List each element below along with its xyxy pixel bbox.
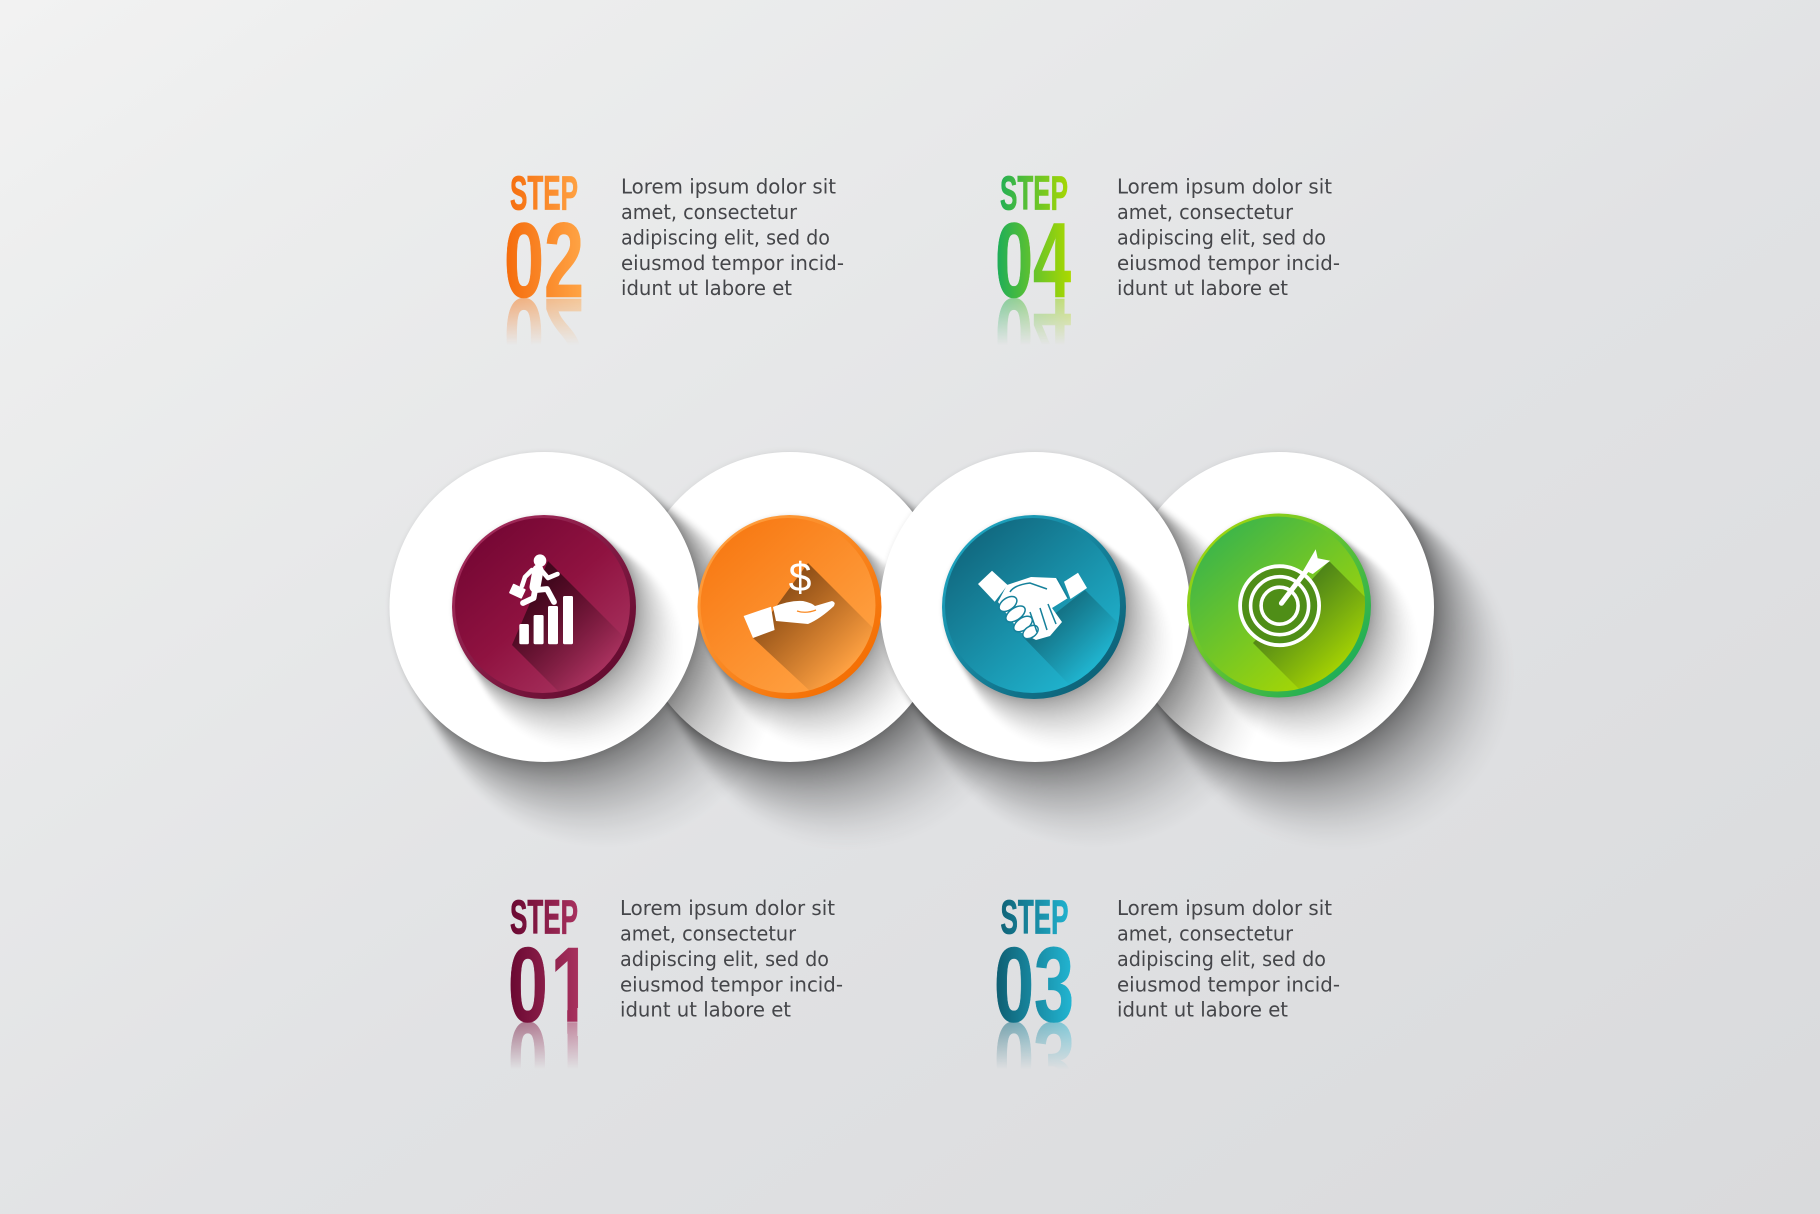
step 01 block [510, 900, 842, 1066]
step 02 block [506, 176, 844, 342]
orange badge [698, 515, 882, 699]
step 03 block [996, 900, 1340, 1065]
white circle 2 [665, 451, 975, 834]
step 01 body text: amet, consectetur [620, 922, 797, 946]
step 04 body text: adipiscing elit, sed do [1117, 226, 1326, 250]
step 03 body text [1117, 896, 1340, 1022]
green badge [1187, 514, 1371, 698]
step 04 body text: Lorem ipsum dolor sit [1117, 174, 1332, 198]
icon: hand holding dollar: $ [789, 554, 812, 600]
step 03 body text: eiusmod tempor incid- [1117, 972, 1340, 996]
step 04 body text: amet, consectetur [1117, 200, 1294, 224]
step 01 number [510, 946, 578, 1023]
step 03 body text: adipiscing elit, sed do [1117, 947, 1326, 971]
step 03 body text: Lorem ipsum dolor sit [1117, 896, 1332, 920]
step 01 body text: eiusmod tempor incid- [620, 972, 843, 996]
step 01 heading: STEP [510, 892, 578, 944]
step 02 body text: eiusmod tempor incid- [621, 251, 844, 275]
icon: handshake [978, 571, 1087, 641]
step 02 number reflection: 02 [504, 276, 584, 396]
step 01 number reflection: 1 [550, 1000, 592, 1120]
step 03 body text: amet, consectetur [1117, 922, 1294, 946]
step 04 number: 04 [995, 200, 1071, 320]
step 04 block [998, 176, 1340, 342]
step 02 body text: idunt ut labore et [621, 276, 792, 300]
step 01 body text: Lorem ipsum dolor sit [620, 896, 835, 920]
white circle 1 [390, 452, 774, 845]
icon: hand holding dollar [744, 554, 835, 638]
step 03 body text: idunt ut labore et [1117, 998, 1288, 1022]
step 01 number reflection [510, 1022, 578, 1066]
step 01 body text [620, 896, 843, 1022]
step 03 number: 03 [994, 924, 1074, 1044]
icon: target with arrow [1240, 549, 1330, 646]
white circle 3 [880, 452, 1265, 845]
step 03 number reflection: 03 [994, 1000, 1074, 1120]
step 02 number: 02 [504, 200, 584, 320]
step 01 body text: idunt ut labore et [620, 998, 791, 1022]
step 04 body text: idunt ut labore et [1117, 276, 1288, 300]
step 02 body text: adipiscing elit, sed do [621, 226, 830, 250]
step 01 number reflection: 0 [508, 1000, 548, 1120]
step 04 body text: eiusmod tempor incid- [1117, 251, 1340, 275]
step 01 number: 1 [550, 924, 592, 1044]
step 02 body text [621, 174, 844, 300]
maroon badge [452, 515, 636, 699]
teal badge [942, 515, 1126, 699]
step 04 heading: STEP [1000, 168, 1068, 220]
step 01 body text: adipiscing elit, sed do [620, 947, 829, 971]
step 03 heading: STEP [1000, 892, 1068, 944]
step 01 number: 0 [508, 924, 548, 1044]
step 02 heading: STEP [510, 168, 578, 220]
step 02 body text: Lorem ipsum dolor sit [621, 174, 836, 198]
step 04 body text [1117, 174, 1340, 300]
white circle 4 [1155, 451, 1500, 834]
step 04 number reflection: 04 [995, 276, 1071, 396]
icon: businessman climbing bar chart [509, 554, 573, 644]
step 02 body text: amet, consectetur [621, 200, 798, 224]
